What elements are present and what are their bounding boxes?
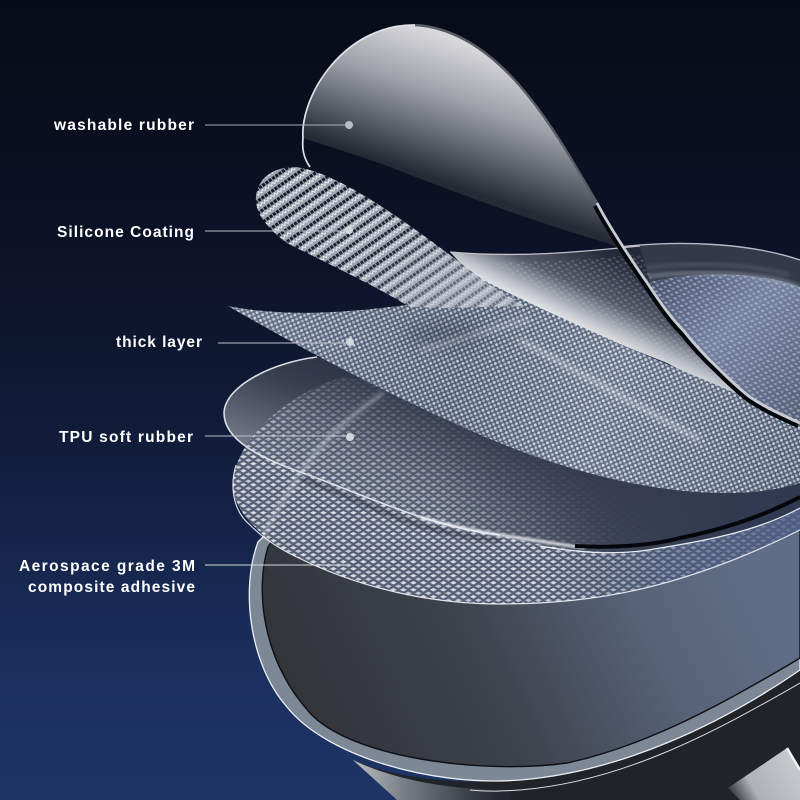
glare line	[263, 393, 383, 537]
thick mesh layer	[228, 250, 800, 493]
disc dark face	[262, 500, 800, 767]
silver bracket	[728, 748, 800, 800]
label: Aerospace grade 3M composite adhesive	[19, 558, 347, 596]
label: TPU soft rubber	[59, 429, 354, 446]
label: washable rubber	[53, 117, 353, 134]
mount disc	[249, 500, 800, 791]
washable rubber teardrop	[303, 25, 800, 426]
TPU rim	[224, 357, 500, 535]
mount base body	[353, 655, 800, 800]
dark patch on mesh	[405, 323, 485, 347]
shadow under rim	[300, 478, 500, 540]
silicone coating layer	[256, 167, 525, 308]
label: Silicone Coating: Silicone Coating	[57, 224, 194, 241]
label: Aerospace grade 3M composite adhesive: Aerospace grade 3M	[19, 558, 195, 575]
TPU glass overlay	[224, 357, 800, 553]
teardrop rim	[303, 25, 415, 167]
adhesive mesh layer	[233, 377, 800, 604]
label: thick layer	[116, 334, 354, 351]
label: TPU soft rubber: TPU soft rubber	[59, 429, 193, 446]
light band on mesh	[520, 340, 700, 440]
label: Silicone Coating	[57, 224, 353, 241]
back disc mesh	[650, 274, 800, 425]
TPU disc base	[224, 357, 800, 552]
label: thick layer: thick layer	[116, 334, 202, 351]
label: Aerospace grade 3M composite adhesive: composite adhesive	[28, 579, 195, 596]
label: washable rubber: washable rubber	[53, 117, 194, 134]
back disc	[620, 243, 800, 425]
lifted sheet	[450, 246, 760, 412]
